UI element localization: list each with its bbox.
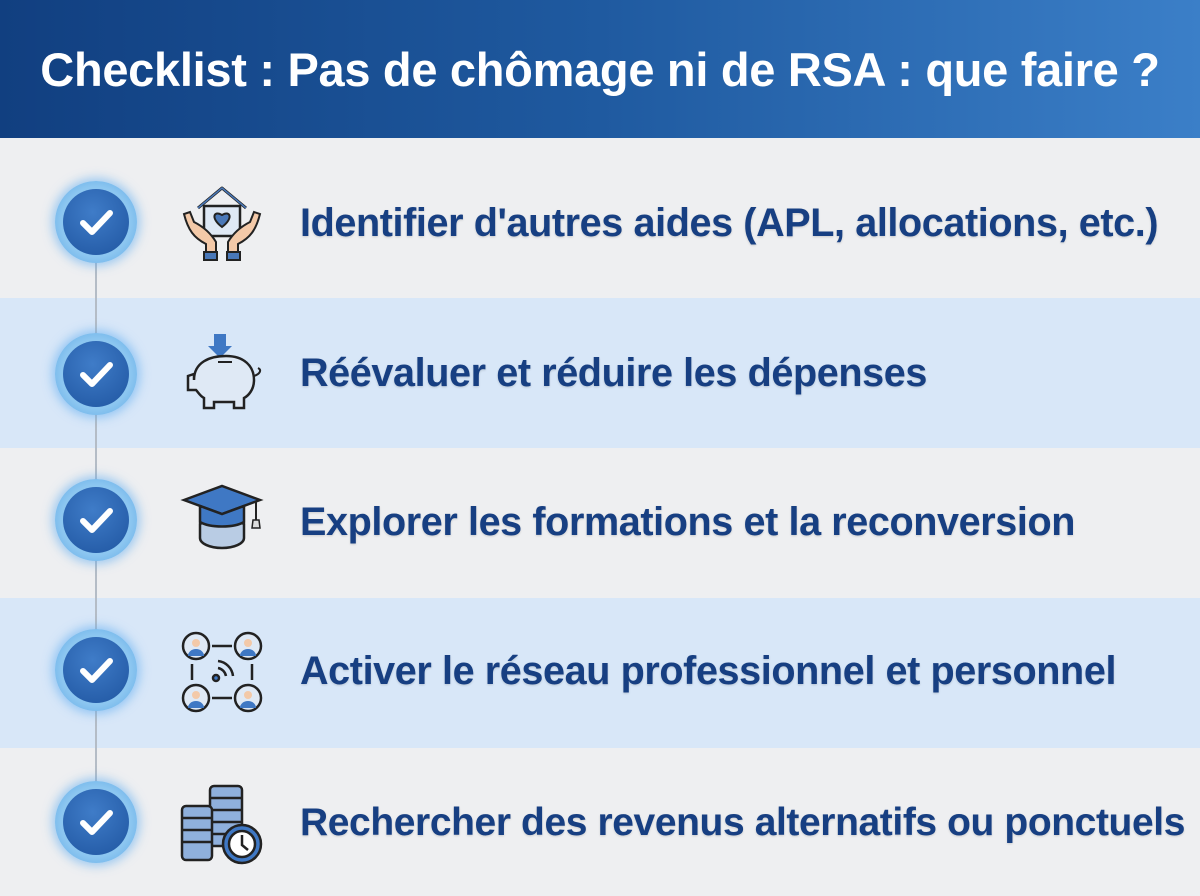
timeline connector [95,222,97,822]
check 4 [55,629,137,711]
icon: graduation cap with gear [180,484,264,550]
text 4: Activer le réseau professionnel et personnel [300,649,1116,693]
check 3 [55,479,137,561]
text 5: Rechercher des revenus alternatifs ou ponctuels [300,801,1185,844]
check 1 [55,181,137,263]
icon: piggy bank [186,334,262,410]
row 4 background [0,598,1200,748]
icon: network of people [182,632,262,712]
check 2 [55,333,137,415]
text 3: Explorer les formations et la reconversion [300,500,1075,544]
title: Checklist : Pas de chômage ni de RSA : que faire ? [40,43,1160,96]
row 3 background [0,448,1200,598]
check 5 [55,781,137,863]
title [0,0,1200,138]
icon: hands with house [182,186,262,261]
text 2: Réévaluer et réduire les dépenses [300,351,927,395]
row 1 background [0,138,1200,298]
row 5 background [0,748,1200,896]
text 1: Identifier d'autres aides (APL, allocations, etc.) [300,201,1158,245]
icon: coins and clock [180,784,262,864]
row 2 background [0,298,1200,448]
